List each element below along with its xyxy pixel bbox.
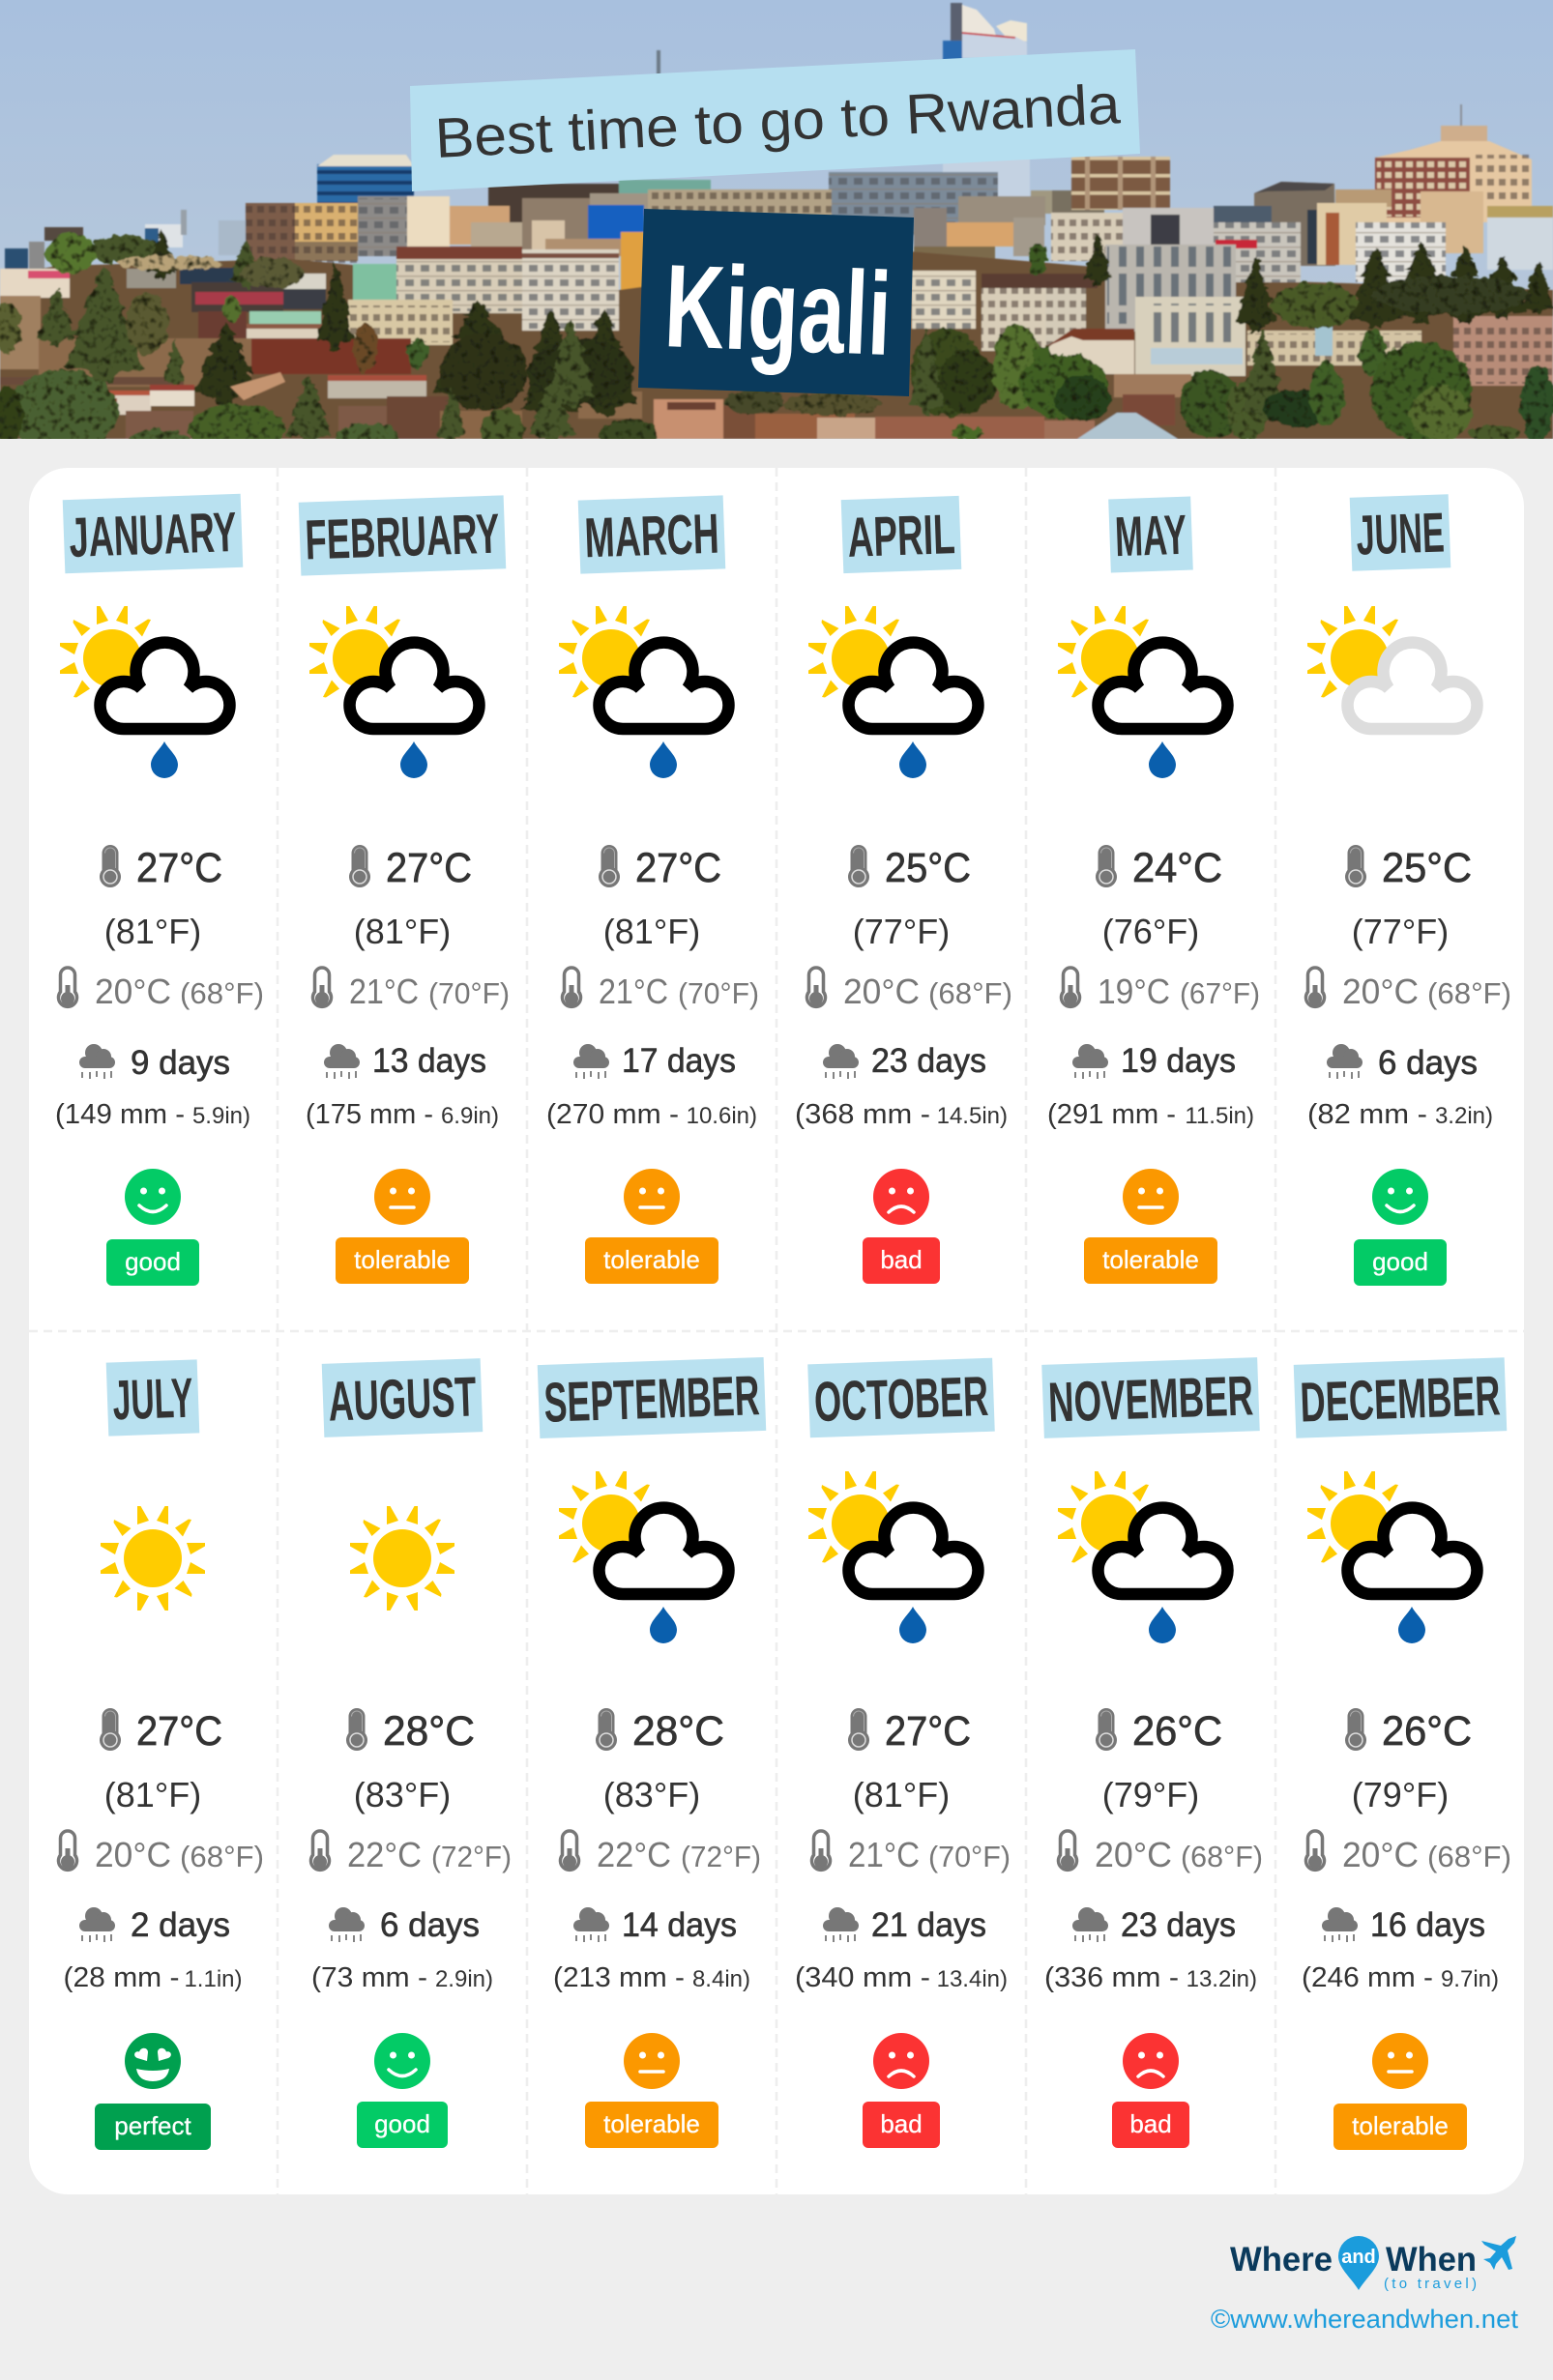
panel: May (1047, 497, 1260, 1284)
rainfall: 14 days (622, 1906, 737, 1944)
month label (538, 1357, 766, 1438)
average high temperature: 27°C (635, 845, 721, 891)
rating: tolerable (585, 1169, 718, 1284)
average high temperature: 24°C (1132, 845, 1222, 891)
average high temperature (1345, 1708, 1472, 1814)
rainfall (546, 1042, 757, 1130)
panel: April (795, 496, 1012, 1284)
average low temperature: (68°F) (180, 976, 264, 1010)
average high temperature (848, 845, 971, 951)
average low temperature: (68°F) (1427, 976, 1511, 1010)
rainfall: (175 mm - (306, 1099, 433, 1130)
city name block: Kigali (638, 209, 914, 396)
average high temperature: (81°F) (354, 912, 451, 951)
average low temperature (1305, 1831, 1511, 1874)
rainfall (1307, 1044, 1493, 1130)
rainfall (1044, 1906, 1257, 1993)
rating: perfect: perfect (114, 2111, 192, 2140)
rating: bad: bad (1129, 2109, 1172, 2138)
rainfall: 6 days (380, 1906, 480, 1944)
rating: tolerable (336, 1169, 469, 1284)
rainfall (306, 1042, 499, 1130)
average high temperature (599, 845, 721, 951)
average low temperature: (68°F) (928, 976, 1012, 1010)
rainfall: 2.9in) (435, 1966, 493, 1992)
icon: sun behind rain cloud (808, 606, 979, 778)
rainfall: (213 mm - (553, 1962, 685, 1993)
month label: OCTOBER (813, 1365, 989, 1434)
rating: tolerable (1084, 1169, 1217, 1284)
average high temperature: 27°C (386, 845, 472, 891)
average high temperature: 25°C (1382, 845, 1472, 891)
panel: September (538, 1357, 766, 2148)
rainfall: 23 days (1121, 1906, 1236, 1944)
average high temperature: (81°F) (104, 1775, 201, 1814)
rainfall: 13.4in) (937, 1966, 1008, 1992)
average low temperature: (68°F) (1427, 1840, 1511, 1873)
average high temperature: (83°F) (354, 1775, 451, 1814)
average high temperature: (81°F) (603, 912, 700, 951)
rating: tolerable: tolerable (1102, 1245, 1199, 1274)
average high temperature: 27°C (136, 845, 222, 891)
average high temperature (596, 1708, 724, 1814)
panel: February (299, 495, 510, 1284)
logo: Where and When (to travel): When (1386, 2241, 1477, 2278)
month label (841, 496, 961, 573)
month label (1108, 497, 1193, 572)
average high temperature (349, 845, 472, 951)
average low temperature (311, 1831, 512, 1874)
rating: bad: bad (880, 1245, 923, 1274)
panel: July (58, 1359, 264, 2150)
rainfall: (336 mm - (1044, 1962, 1179, 1993)
rainfall: (82 mm - (1307, 1099, 1427, 1130)
rainfall: (73 mm - (311, 1962, 427, 1993)
rainfall: 8.4in) (692, 1966, 750, 1992)
average low temperature: (70°F) (678, 976, 759, 1010)
average high temperature: 25°C (885, 845, 971, 891)
average low temperature: (68°F) (1181, 1840, 1263, 1873)
average high temperature: (81°F) (853, 1775, 950, 1814)
month label (1350, 494, 1450, 571)
average high temperature: (83°F) (603, 1775, 700, 1814)
average low temperature: 20°C (1095, 1835, 1172, 1874)
rainfall: 11.5in) (1185, 1103, 1254, 1129)
average low temperature: 20°C (1342, 972, 1419, 1011)
rating: good (106, 1169, 199, 1286)
average low temperature: (67°F) (1180, 976, 1260, 1010)
month label: APRIL (846, 503, 956, 569)
rainfall: 3.2in) (1435, 1103, 1493, 1129)
month label: JANUARY (68, 501, 238, 569)
month label: MARCH (583, 503, 720, 569)
average low temperature: (68°F) (180, 1840, 264, 1873)
rating: tolerable (1333, 2033, 1467, 2150)
average high temperature: 28°C (383, 1708, 475, 1755)
icon: sun behind rain cloud (1058, 606, 1228, 778)
average high temperature: (81°F) (104, 912, 201, 951)
icon: sun behind rain cloud (559, 1471, 729, 1643)
rating: bad (863, 2033, 940, 2148)
rainfall (64, 1906, 242, 1993)
rating: good: good (1372, 1247, 1428, 1276)
average high temperature: (77°F) (853, 912, 950, 951)
panel: August (311, 1358, 512, 2148)
rainfall (553, 1906, 750, 1993)
city name block: Kigali: Kigali (662, 240, 894, 380)
month label (578, 495, 725, 574)
average low temperature (806, 968, 1012, 1011)
rainfall: 6.9in) (441, 1103, 499, 1129)
panel: January (55, 494, 264, 1286)
rainfall: 14.5in) (937, 1103, 1008, 1129)
icon: sun behind rain cloud (1058, 1471, 1228, 1643)
icon: sun behind rain cloud (309, 606, 480, 778)
panel: October (795, 1358, 1011, 2148)
average low temperature: 20°C (1342, 1835, 1419, 1874)
logo: Where and When (to travel) (1230, 2236, 1516, 2292)
icon: sun behind grey cloud (1307, 606, 1478, 729)
average low temperature: 20°C (843, 972, 920, 1011)
rating: bad (863, 1169, 940, 1284)
average low temperature (563, 968, 759, 1011)
average low temperature (561, 1831, 761, 1874)
rating: tolerable: tolerable (603, 1245, 700, 1274)
month label: MAY (1114, 504, 1187, 568)
month label: JUNE (1355, 501, 1446, 567)
rainfall: 6 days (1378, 1044, 1478, 1082)
icon: sun behind rain cloud (559, 606, 729, 778)
title banner: Best time to go to Rwanda (433, 73, 1123, 170)
website credit: ©www.whereandwhen.net (1211, 2305, 1518, 2334)
rainfall: (340 mm - (795, 1962, 930, 1993)
rating: tolerable (585, 2033, 718, 2148)
average low temperature: (72°F) (431, 1840, 512, 1873)
icon: sun behind rain cloud (808, 1471, 979, 1643)
logo: Where and When (to travel): (to travel) (1384, 2276, 1477, 2292)
average high temperature: 27°C (136, 1708, 222, 1755)
average low temperature (313, 968, 510, 1011)
panel: December (1294, 1357, 1511, 2150)
month label (322, 1358, 483, 1437)
rainfall (795, 1042, 1008, 1130)
rainfall: 10.6in) (687, 1103, 757, 1129)
average low temperature: 21°C (848, 1835, 920, 1874)
average low temperature (58, 1831, 264, 1874)
average high temperature: 28°C (632, 1708, 724, 1755)
average low temperature: 21°C (349, 972, 419, 1011)
logo: Where and When (to travel): and (1341, 2247, 1376, 2268)
rating: tolerable: tolerable (603, 2109, 700, 2138)
rating: perfect (95, 2033, 211, 2150)
logo: Where and When (to travel): Where (1230, 2241, 1333, 2278)
rating: good (1354, 1169, 1447, 1286)
panel: June (1305, 494, 1511, 1286)
month label (299, 495, 506, 576)
month label: NOVEMBER (1047, 1364, 1254, 1435)
month label (1041, 1357, 1260, 1438)
month label (807, 1358, 995, 1437)
icon: sun behind rain cloud (60, 606, 230, 778)
month label: AUGUST (327, 1365, 478, 1434)
rainfall (55, 1044, 250, 1130)
rainfall: 23 days (871, 1042, 986, 1080)
rainfall (1047, 1042, 1254, 1130)
rainfall: 1.1in) (184, 1966, 242, 1992)
average low temperature: (70°F) (928, 1840, 1011, 1873)
rating: bad: bad (880, 2109, 923, 2138)
rainfall (795, 1906, 1008, 1993)
month label (106, 1359, 199, 1437)
average high temperature: 27°C (885, 1708, 971, 1755)
month label: SEPTEMBER (542, 1364, 761, 1435)
average low temperature: 22°C (347, 1835, 422, 1874)
average high temperature (1096, 1708, 1222, 1814)
average low temperature: 19°C (1098, 972, 1170, 1011)
rainfall: 2 days (131, 1906, 230, 1944)
average high temperature (1345, 845, 1472, 951)
panel: November (1041, 1357, 1263, 2148)
rainfall: 9.7in) (1441, 1966, 1499, 1992)
average low temperature (1058, 1831, 1263, 1874)
average high temperature (848, 1708, 971, 1814)
rating: good: good (374, 2109, 430, 2138)
average low temperature (812, 1831, 1011, 1874)
average high temperature (346, 1708, 475, 1814)
average low temperature (58, 968, 264, 1011)
icon: sun (101, 1506, 205, 1611)
average low temperature: 21°C (599, 972, 668, 1011)
icon: sun (350, 1506, 454, 1611)
rainfall: 9 days (131, 1044, 230, 1082)
rainfall: (270 mm - (546, 1099, 679, 1130)
average low temperature: (70°F) (428, 976, 510, 1010)
rating: good (357, 2033, 448, 2148)
average low temperature: 20°C (95, 972, 171, 1011)
month label (63, 494, 243, 573)
average high temperature: (79°F) (1102, 1775, 1199, 1814)
calendar card (29, 468, 1524, 2194)
rainfall: 17 days (622, 1042, 736, 1080)
rainfall (311, 1906, 493, 1993)
rating: tolerable: tolerable (354, 1245, 451, 1274)
average high temperature (100, 1708, 222, 1814)
average low temperature (1305, 968, 1511, 1011)
average low temperature (1062, 968, 1260, 1011)
rainfall (1302, 1906, 1499, 1993)
rainfall: 13 days (372, 1042, 486, 1080)
average low temperature: (72°F) (681, 1840, 761, 1873)
title banner (410, 49, 1140, 191)
average high temperature: (79°F) (1352, 1775, 1449, 1814)
average high temperature (1096, 845, 1222, 951)
average high temperature: 26°C (1382, 1708, 1472, 1755)
header photo: Kigali skyline (0, 0, 1553, 457)
average high temperature (100, 845, 222, 951)
rainfall: 21 days (871, 1906, 986, 1944)
rainfall: 5.9in) (192, 1103, 250, 1129)
rainfall: (149 mm - (55, 1099, 185, 1130)
rating: bad (1112, 2033, 1189, 2148)
rainfall: (28 mm - (64, 1962, 179, 1993)
rainfall: 16 days (1370, 1906, 1485, 1944)
rating: tolerable: tolerable (1352, 2111, 1449, 2140)
month label: FEBRUARY (304, 503, 501, 571)
average low temperature: 20°C (95, 1835, 171, 1874)
rainfall: (246 mm - (1302, 1962, 1433, 1993)
icon: sun behind rain cloud (1307, 1471, 1478, 1643)
rainfall: (291 mm - (1047, 1099, 1176, 1130)
average low temperature: 22°C (597, 1835, 671, 1874)
rainfall: (368 mm - (795, 1099, 930, 1130)
average high temperature: 26°C (1132, 1708, 1222, 1755)
average high temperature: (77°F) (1352, 912, 1449, 951)
rainfall: 13.2in) (1187, 1966, 1257, 1992)
rainfall: 19 days (1121, 1042, 1236, 1080)
month label: JULY (111, 1367, 194, 1432)
panel: March (546, 495, 759, 1284)
rating: good: good (125, 1247, 181, 1276)
average high temperature: (76°F) (1102, 912, 1199, 951)
